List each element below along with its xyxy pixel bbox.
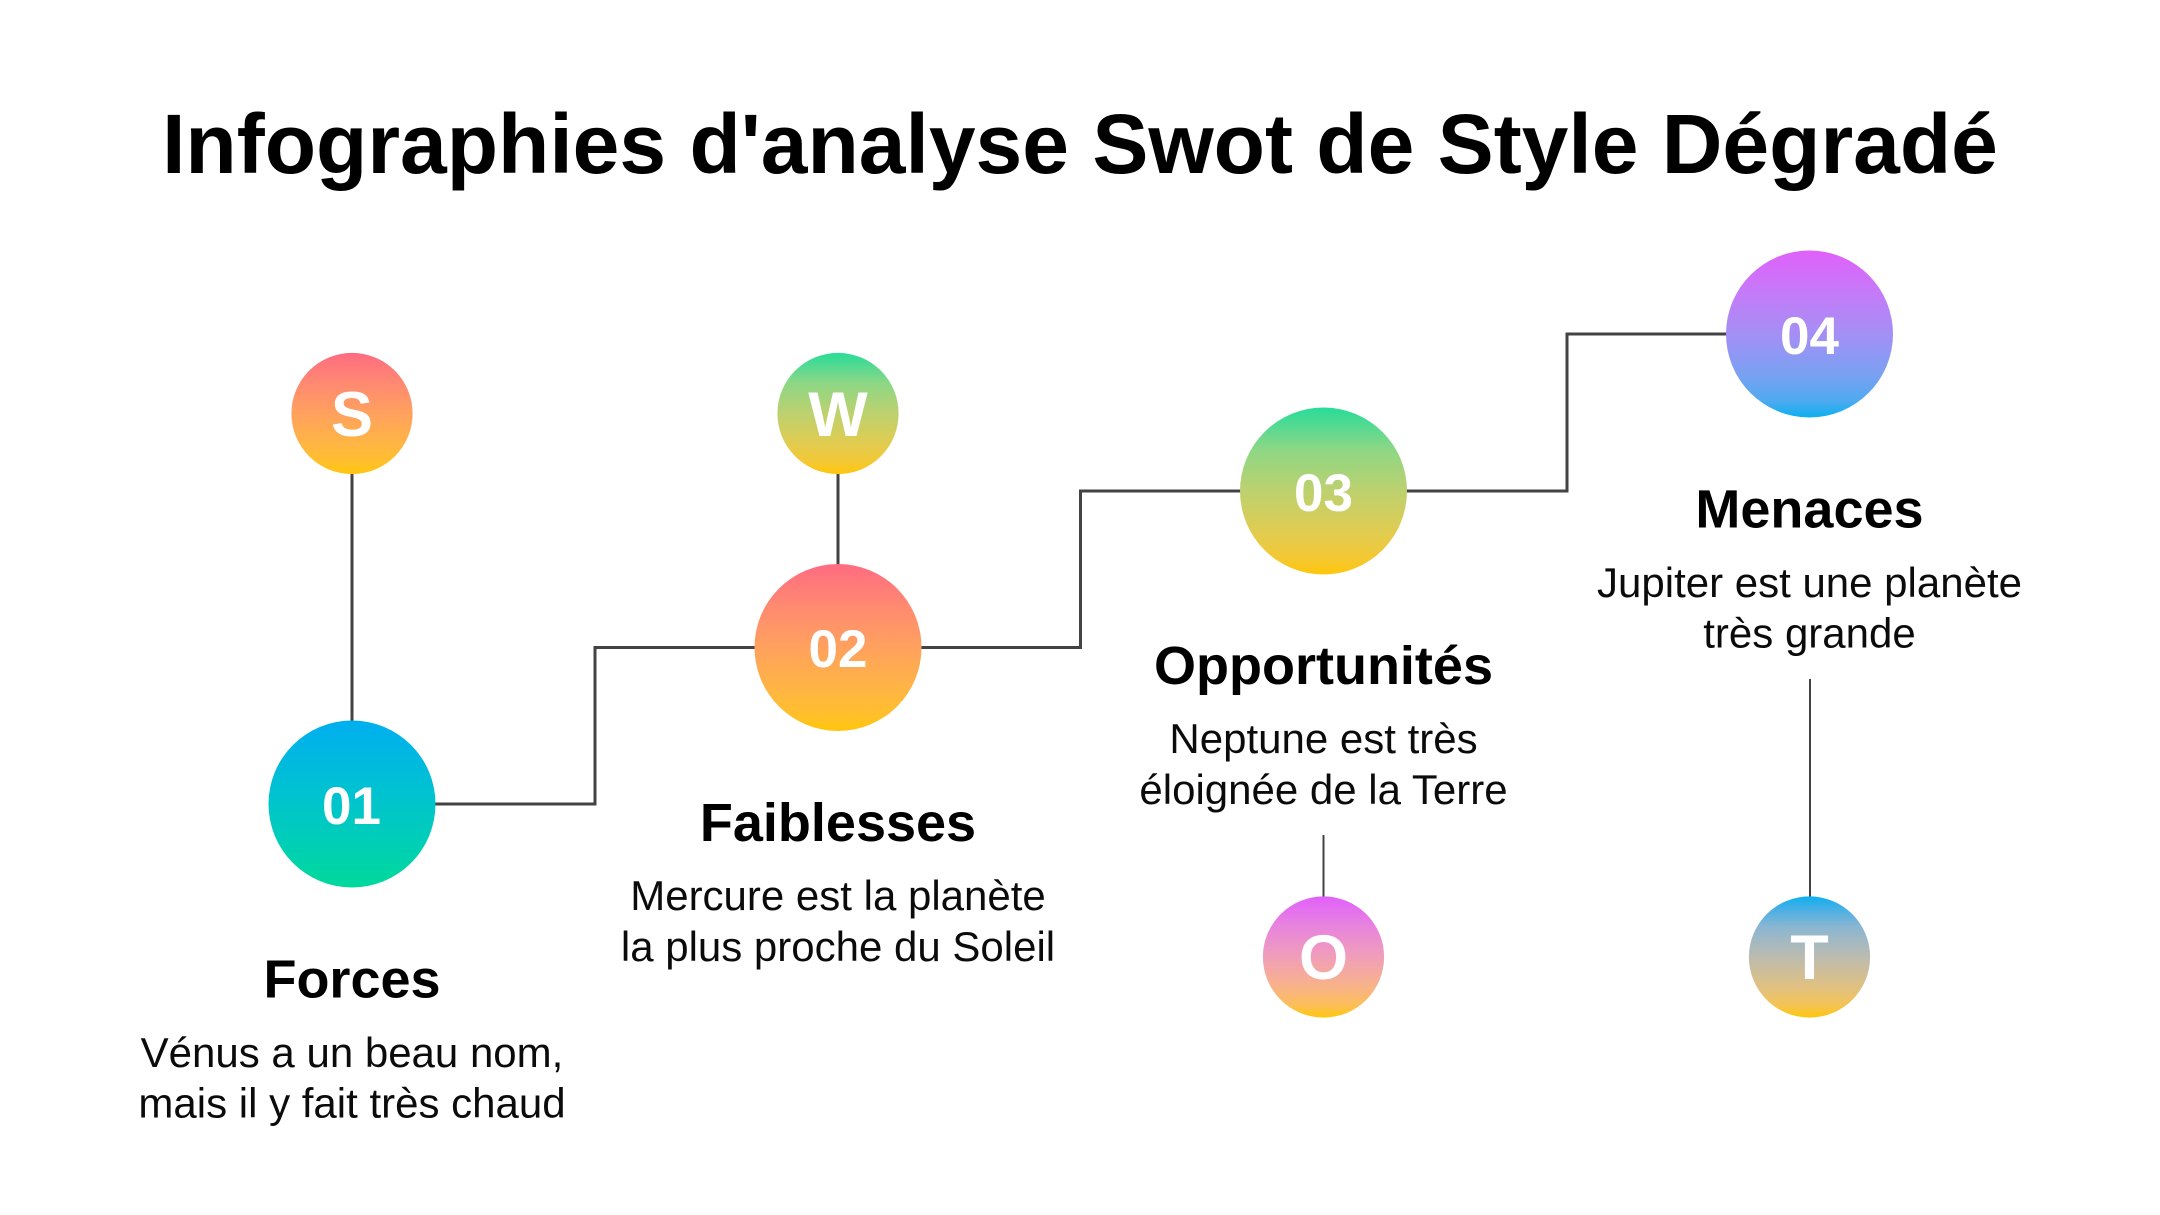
badge: T: T [1790,923,1829,993]
text block: Forces: Vénus a un beau nom, [141,1029,563,1076]
connector: O to text [1322,835,1324,900]
badge: W [777,353,899,474]
connector: S to 01 [350,470,354,725]
text block: Opportunités: Neptune est très [1169,715,1478,762]
text block: Menaces: Jupiter est une planète [1597,559,2022,606]
step circle: 01: 01 [322,777,381,836]
step circle: 02 [754,564,922,731]
connector: W to 02 [836,470,840,568]
text block: Menaces: très grande [1703,610,1916,656]
title: Infographies d'analyse Swot de Style Dégradé [162,97,1998,191]
text block: Menaces: Menaces [1695,480,1924,540]
text block: Opportunités: Opportunités [1154,636,1493,696]
text block: Forces: Forces [263,950,441,1010]
badge: S: S [331,380,373,450]
connector: 03 to 04 [1403,334,1730,491]
step circle: 02: 02 [809,620,867,679]
step circle: 01 [268,720,436,888]
text block: Faiblesses [621,793,1055,970]
step circle: 04: 04 [1780,307,1839,366]
text block: Forces: mais il y fait très chaud [138,1080,566,1126]
connector: T to text [1809,679,1811,900]
text block: Opportunités: éloignée de la Terre [1139,766,1508,813]
badge: S [291,353,413,474]
step circle: 04 [1726,250,1893,418]
step circle: 03: 03 [1294,464,1353,523]
text block: Menaces [1597,480,2022,656]
step circle: 03 [1240,408,1407,574]
badge: O [1263,896,1384,1018]
connector: 01 to 02 [432,648,760,804]
text block: Forces [138,950,566,1126]
connector: 02 to 03 [918,491,1245,648]
text block: Opportunités [1139,636,1508,813]
badge: W: W [808,380,868,450]
text block: Faiblesses: Mercure est la planète [630,872,1046,919]
badge: O: O [1299,923,1348,993]
text block: Faiblesses: la plus proche du Soleil [621,923,1055,970]
badge: T [1749,896,1870,1018]
text block: Faiblesses: Faiblesses [700,793,976,853]
